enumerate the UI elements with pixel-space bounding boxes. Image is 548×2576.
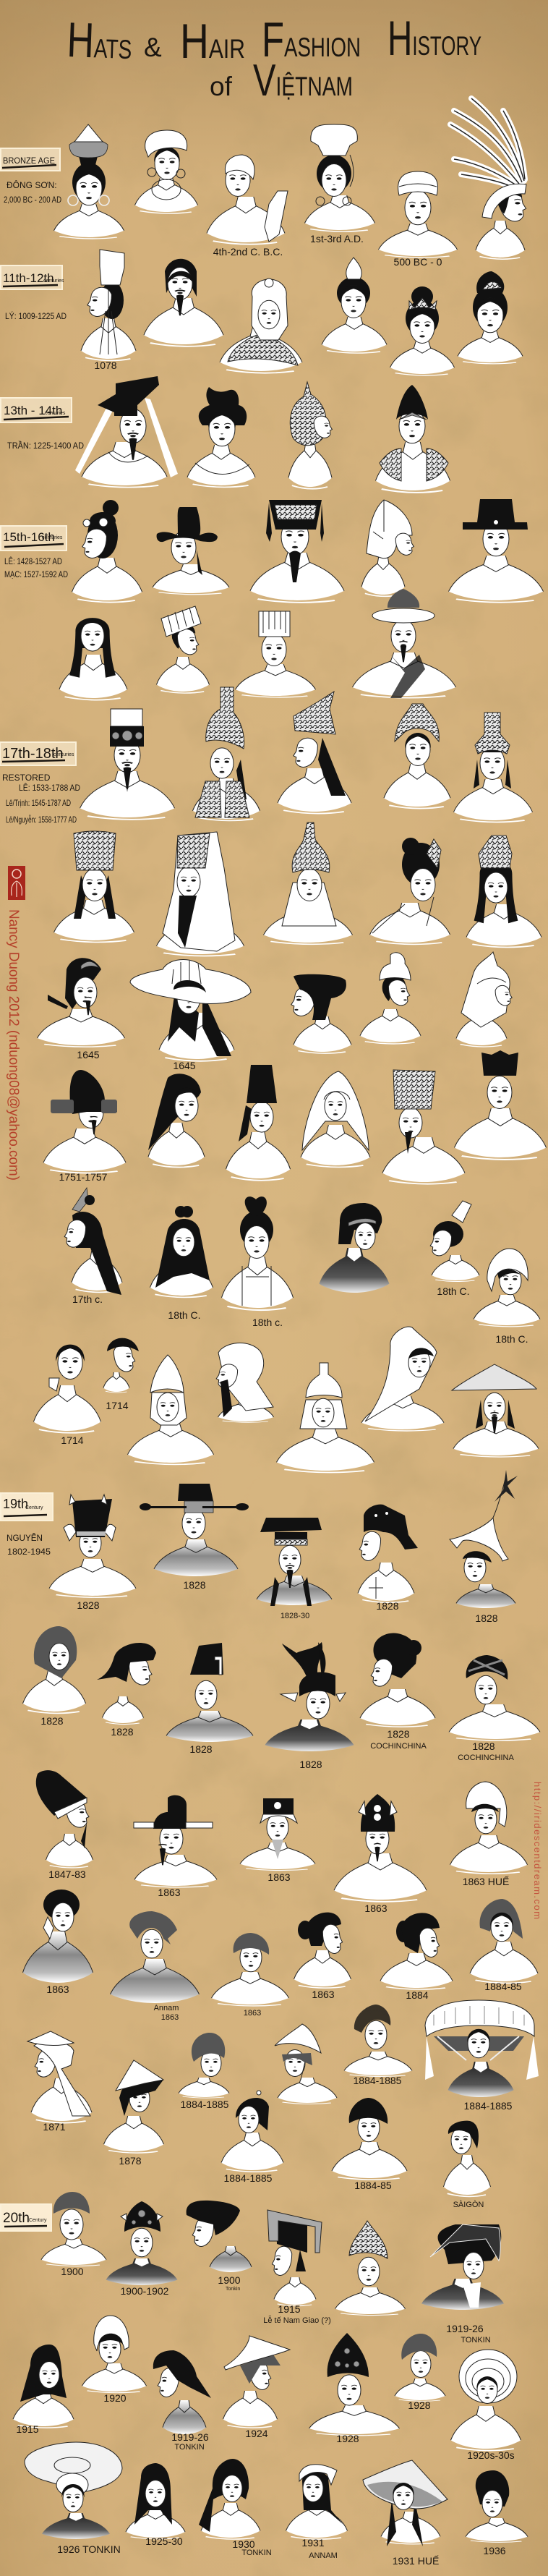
figure: woman with grey hood	[470, 1899, 538, 1983]
caption: 1st-3rd A.D.: 1st-3rd A.D.	[310, 233, 364, 245]
section: 17th-18th centuries	[0, 687, 532, 825]
period label: Bronze Age	[1, 148, 60, 171]
section: 19th century, late row	[221, 2091, 490, 2209]
caption: 17th c.: 17th c.	[72, 1293, 103, 1305]
figure: woman with double-loop hair	[187, 387, 255, 487]
period label: 17th-18th centuries: centuries	[53, 752, 74, 757]
figure: woman with dark collar wrap	[23, 1890, 93, 1983]
period label: 15th-16th centuries: centuries	[42, 535, 63, 540]
caption: 1900-1902: 1900-1902	[121, 2285, 169, 2297]
figure: woman with side bun, Saigon	[444, 2121, 490, 2196]
caption: 1714: 1714	[106, 1400, 129, 1411]
figure: official with black hat and white bars	[134, 1795, 217, 1887]
section: 17th-18th centuries, fourth row	[43, 1050, 547, 1184]
figure: man with dark cap turned backward	[97, 1643, 156, 1725]
figure: woman with double bun and long hair	[150, 1206, 213, 1297]
caption: 1847-83: 1847-83	[48, 1869, 86, 1880]
caption: Saigon: SÀIGÒN	[453, 2200, 484, 2209]
figure: man with large black hair pouf	[291, 974, 351, 1053]
figure: woman with high bun ornament	[458, 271, 523, 364]
caption: 1900 Tonkin	[218, 2274, 241, 2292]
caption: 1900 Tonkin: 1900	[218, 2274, 241, 2286]
caption: 1828: 1828	[40, 1715, 64, 1727]
caption: 1828: 1828	[183, 1579, 206, 1591]
figure: old man with tall white fluted cap	[236, 611, 315, 697]
caption: 1884: 1884	[406, 1989, 429, 2001]
figure: woman with long straight hair	[59, 618, 127, 700]
title	[66, 11, 481, 106]
caption: 1919-26 Tonkin	[446, 2323, 491, 2345]
dynasty dates: Restored Le, Trinh, Nguyen: Lê/Nguyễn: 1558-1777 AD	[6, 814, 77, 825]
caption: 1828: 1828	[475, 1612, 498, 1624]
figure: woman with fan crown	[53, 124, 124, 239]
figure: bearded man with white turban	[216, 1343, 273, 1422]
figure: woman with flame hair ornament	[322, 258, 387, 353]
caption: 1919-26 Tonkin: TONKIN	[461, 2336, 491, 2345]
dynasty dates: Restored Le, Trinh, Nguyen	[2, 773, 80, 825]
title: FASHION	[262, 12, 361, 67]
caption: Annam: ANNAM	[309, 2551, 338, 2560]
figure: man with tall black hat	[226, 1065, 291, 1181]
figure: elderly official with black winged hat	[153, 507, 229, 595]
dynasty dates: Nguyen: 1802-1945	[7, 1547, 51, 1557]
figure: woman with banded cap	[379, 171, 457, 258]
figure: woman with large fringed hat and tassels	[425, 2000, 539, 2097]
figure: woman with white kerchief	[286, 2465, 347, 2539]
caption: 1919-26 Tonkin	[171, 2431, 209, 2452]
caption: 1863: 1863	[267, 1871, 291, 1883]
title: HISTORY	[388, 11, 481, 66]
dynasty dates: Restored Le, Trinh, Nguyen: LÊ: 1533-1788 AD	[19, 782, 80, 793]
section: 19th century, second 1863 row	[23, 1890, 538, 2022]
caption: 1931 Hue: 1931 HUẾ	[393, 2555, 439, 2567]
dynasty dates: Dong Son: 2,000 BC - 200 AD	[4, 195, 61, 205]
period label: 11th-12th centuries: centuries	[43, 279, 64, 284]
period label: 15th-16th centuries: 15th-16th	[3, 530, 55, 544]
figure: woman in profile with small crown	[430, 1201, 479, 1282]
figure: woman with tall black topknot	[376, 385, 450, 493]
figure: woman with dark hair and pendant	[199, 2459, 260, 2539]
figure: warrior with cap	[207, 155, 288, 245]
caption: 1828 Cochinchina: 1828	[387, 1728, 410, 1740]
figure: emperor with filigree crown	[335, 2221, 405, 2316]
section: 20th century, third row	[25, 2442, 528, 2567]
figure: woman with hairpin and necklace	[221, 2091, 283, 2172]
figure: man under black wide hat with scarf	[421, 2224, 504, 2310]
caption: 1828 Cochinchina	[458, 1740, 514, 1762]
period label: 20th century	[1, 2204, 51, 2231]
period label: 20th century: Century	[29, 2218, 47, 2223]
figure: woman with dark updo and veil	[370, 838, 450, 944]
section: Bronze Age	[1, 98, 526, 268]
caption: 1920: 1920	[103, 2392, 127, 2404]
figure: figure with ornate headpiece from behind	[288, 382, 332, 489]
caption: 1930 Tonkin	[232, 2538, 272, 2557]
caption: 500 BC - 0: 500 BC - 0	[394, 256, 442, 268]
dynasty dates: Tran: TRẦN: 1225-1400 AD	[7, 440, 84, 451]
figure: woman with large round white halo turban	[451, 2350, 521, 2451]
figure: man with white fluted hat	[156, 606, 210, 693]
caption: 1884-1885: 1884-1885	[354, 2075, 402, 2086]
figure: woman with tiered crown	[454, 713, 532, 822]
figure: man with white bun cap	[360, 953, 421, 1044]
figure: warrior with domed white helmet	[456, 952, 512, 1047]
figure: woman with white headband	[82, 2316, 146, 2393]
caption: 18th c.: 18th c.	[252, 1317, 283, 1328]
caption: 1925-30: 1925-30	[145, 2535, 183, 2547]
section: 17th-18th centuries, ornate women and officials	[53, 822, 541, 956]
figure: bearded man with wide conical hat	[452, 1364, 539, 1457]
figure: woman with long white veil	[301, 1071, 370, 1167]
dynasty dates: Nguyen	[7, 1532, 51, 1557]
caption: Annam 1863: 1863	[161, 2013, 179, 2022]
caption: 1919-26 Tonkin: 1919-26	[171, 2431, 209, 2443]
section: 11th-12th centuries	[1, 250, 523, 375]
figure: queen with large carved hat	[53, 831, 134, 942]
period label: 13th-14th centuries: centuries	[45, 411, 66, 416]
title: of	[210, 72, 233, 101]
figure: old official with tall black hat	[334, 1794, 427, 1902]
figure: woman with tall double bun	[221, 1196, 294, 1310]
figure: man with dark turban 1900	[41, 2192, 106, 2266]
figure: man with black dotted hood hat	[358, 1505, 418, 1602]
figure: man with feather plume headdress	[450, 98, 526, 259]
figure: woman with tall black turban	[332, 2098, 407, 2180]
caption: 1714: 1714	[61, 1434, 84, 1446]
figure: man with crossed turban	[449, 1655, 540, 1740]
period label: 17th-18th centuries: 17th-18th	[2, 746, 64, 762]
figure: woman with round headdress and necklace	[134, 130, 198, 213]
figure: emperor with black mortarboard crown	[75, 376, 178, 488]
title: HATS	[66, 12, 133, 69]
section: 17th-18th centuries, third row	[38, 952, 512, 1071]
caption: 1828 Cochinchina	[370, 1728, 427, 1751]
figure: woman with short dark hair	[466, 2470, 528, 2542]
title: VIỆTNAM	[253, 56, 353, 106]
caption: 1828-30: 1828-30	[281, 1612, 309, 1620]
figure: woman in profile with long hair and crest	[64, 1188, 122, 1295]
dynasty dates: Restored Le, Trinh, Nguyen: Lê/Trịnh: 1545-1787 AD	[6, 798, 71, 808]
figure: official with rounded black winged hat	[43, 1070, 126, 1173]
dynasty dates: Dong Son	[4, 179, 61, 205]
caption: Annam 1863	[154, 2004, 179, 2022]
caption: 1884-85: 1884-85	[354, 2180, 392, 2191]
caption: 1900 Tonkin: Tonkin	[226, 2287, 240, 2292]
title: HAIR	[180, 14, 245, 69]
caption: 1863: 1863	[244, 2009, 261, 2018]
caption: 1919-26 Tonkin: TONKIN	[174, 2443, 205, 2452]
section: 19th century	[1, 1470, 518, 1624]
figure: man with tall black ornate hat	[267, 2210, 322, 2306]
caption: 1828: 1828	[111, 1726, 134, 1738]
caption: 1884-1885: 1884-1885	[181, 2099, 229, 2110]
figure: man with wrapped scarf and flat hat	[27, 2031, 92, 2123]
seal: artist signature stamp	[8, 866, 25, 900]
period label: Bronze Age: BRONZE AGE	[3, 156, 55, 166]
section: 15th-16th centuries	[1, 499, 544, 603]
dynasty dates: Nguyen: NGUYỄN	[7, 1532, 43, 1543]
figure: bearded man with tall ornate hat	[382, 1070, 465, 1184]
figure: woman with dark scarf turban	[110, 1911, 200, 2003]
figure: noblewoman with swept ornate crown	[278, 692, 351, 814]
caption: 1078: 1078	[94, 360, 117, 371]
figure: emperor with black crown and white ear flaps	[49, 1495, 136, 1597]
figure: emperor with black jewelled crown	[106, 2201, 178, 2285]
dynasty dates: Dong Son: ĐÔNG SƠN:	[7, 179, 57, 190]
caption: 1645: 1645	[77, 1049, 100, 1060]
caption: Le te Nam Giao: Lễ tế Nam Giao (?)	[263, 2316, 331, 2325]
figure: official with long-winged hat	[140, 1484, 249, 1576]
figure: woman with high crown and long hair	[466, 836, 541, 947]
section: 19th century, second row	[23, 1626, 540, 1770]
section: 20th century, second row	[13, 2316, 521, 2461]
caption: 1884-85: 1884-85	[484, 1981, 522, 1992]
caption: 1828: 1828	[189, 1743, 213, 1755]
dynasty dates: Le and Mac: MẠC: 1527-1592 AD	[4, 569, 68, 579]
figure: woman with huge disk hat	[25, 2442, 122, 2539]
caption: 1915: 1915	[16, 2423, 39, 2435]
section: early 18th century, 1714 row	[33, 1327, 539, 1473]
section: 19th century, 1871 to 1885 row	[27, 2000, 539, 2167]
period label: 19th century	[1, 1493, 53, 1521]
caption: 1928: 1928	[336, 2433, 359, 2444]
figure: woman with long flowing hair	[148, 1074, 205, 1168]
caption: 1930 Tonkin: 1930	[232, 2538, 255, 2550]
figure: woman with low hair bun	[380, 1913, 453, 1989]
caption: 1924: 1924	[245, 2428, 268, 2439]
figure: woman with headscarf tie	[33, 1345, 101, 1433]
figure: man with hair tied back	[294, 1913, 351, 1988]
figure: woman with dark bun	[360, 1633, 435, 1727]
figure: old woman with dark turban	[211, 1933, 289, 2006]
caption: 1919-26 Tonkin: 1919-26	[446, 2323, 484, 2334]
figure: woman with dark hood	[13, 2345, 74, 2428]
figure: man with black turban, profile	[187, 2201, 252, 2272]
figure: man with grey turban	[179, 2033, 229, 2098]
period label: 11th-12th centuries	[1, 265, 64, 289]
caption: 18th C.: 18th C.	[495, 1333, 528, 1345]
figure: woman with white flat turban	[474, 1249, 540, 1327]
figure: man with tall white cone hat	[127, 1355, 214, 1464]
figure: old man with dark hair and robe	[320, 1203, 389, 1293]
figure: woman with dark turban	[23, 1626, 85, 1713]
figure: queen with towering ornate crown	[192, 687, 260, 820]
caption: 1863: 1863	[46, 1984, 69, 1995]
period label: 13th-14th centuries: 13th - 14th	[4, 404, 62, 417]
caption: 1828: 1828	[299, 1759, 322, 1770]
caption: 1900: 1900	[61, 2266, 84, 2277]
dynasty dates: Restored Le, Trinh, Nguyen: RESTORED	[2, 773, 51, 783]
period label: 13th-14th centuries	[1, 398, 72, 422]
figure: man with black brimmed hat	[448, 499, 544, 603]
section: 15th-16th centuries, second row	[59, 589, 455, 700]
figure: child with cropped hair	[103, 1338, 139, 1393]
figure: king with black ornate hat	[80, 709, 175, 820]
figure: man with white conical hat and feather	[450, 1470, 518, 1608]
figure: man with grey turban 1928	[395, 2334, 445, 2401]
period label: 11th-12th centuries: 11th-12th	[3, 271, 54, 285]
caption: 1751-1757: 1751-1757	[59, 1171, 108, 1183]
caption: 1863 Hue: 1863 HUẾ	[463, 1876, 509, 1887]
section: 19th century, 1863 row	[36, 1770, 528, 1914]
figure: man with conical hat over turban	[104, 2060, 163, 2153]
caption: 1884-1885: 1884-1885	[224, 2172, 273, 2184]
caption: 18th C.: 18th C.	[168, 1309, 201, 1321]
figure: man with tall ornate white crown	[276, 1363, 374, 1473]
caption: 1828 Cochinchina: COCHINCHINA	[370, 1742, 427, 1751]
figure: man with black notched hat	[454, 1050, 547, 1160]
figure: old man with black and white patterned hat	[240, 1798, 315, 1871]
figure: old woman with white head wrap	[450, 1782, 528, 1874]
caption: Annam 1863: Annam	[154, 2004, 179, 2012]
figure: woman with ornate crown and white veil	[263, 822, 353, 944]
figure: man with white conical hat and chin strap	[275, 2024, 337, 2104]
caption: 4th-2nd C. B.C.: 4th-2nd C. B.C.	[213, 246, 283, 258]
artist credit: Nancy Duong 2012 (nduong08@yahoo.com)	[6, 909, 21, 1181]
period label: 17th-18th centuries	[0, 742, 76, 765]
dynasty dates: Le and Mac	[4, 556, 68, 579]
caption: 1828 Cochinchina: 1828	[472, 1740, 495, 1752]
figure: emperor with towering jewelled crown	[309, 2333, 399, 2436]
dynasty dates: Le and Mac: LÊ: 1428-1527 AD	[4, 556, 62, 566]
caption: 1828: 1828	[376, 1600, 399, 1612]
caption: 1863: 1863	[312, 1989, 335, 2000]
figure: man with conical white hat and dark hair	[223, 2336, 290, 2428]
figure: bearded man with white veil hat	[156, 832, 244, 956]
figure: woman with jewelled tiara	[390, 286, 454, 375]
figure: woman with dark head wrap	[344, 2005, 412, 2076]
figure: woman with headband and long hair	[126, 2463, 185, 2539]
caption: 1878: 1878	[119, 2155, 142, 2167]
caption: 1931: 1931	[301, 2537, 325, 2549]
figure: woman with white head wrap	[361, 1327, 444, 1431]
section: 17th-18th centuries, fifth row	[64, 1188, 540, 1345]
figure: man with tall dark hat and grey robe	[166, 1643, 253, 1742]
caption: 18th C.: 18th C.	[437, 1285, 470, 1297]
period label: 15th-16th centuries	[1, 526, 67, 551]
website URL: http://iridescentdream.com	[532, 1782, 543, 1919]
caption: 1926 Tonkin: 1926 TONKIN	[57, 2543, 121, 2555]
figure: woman with bun and flowers	[72, 500, 142, 603]
caption: 1915: 1915	[278, 2303, 301, 2315]
caption: 1928: 1928	[408, 2399, 431, 2411]
figure: man in white hooded hat, profile	[361, 500, 414, 596]
dynasty dates: Ly: LÝ: 1009-1225 AD	[5, 310, 67, 321]
figure: man with tall curled dark hat	[36, 1770, 93, 1868]
figure: bearded man with black hair	[144, 259, 223, 347]
figure: man with balding head and topknot	[38, 958, 124, 1047]
caption: 1863: 1863	[364, 1903, 388, 1914]
caption: 1936: 1936	[483, 2545, 506, 2556]
figure: woman with non la conical hat	[363, 2460, 448, 2546]
figure: official with flat board hat	[257, 1518, 332, 1606]
figure: man in profile with tall white hat	[81, 250, 136, 360]
caption: 1828 Cochinchina: COCHINCHINA	[458, 1754, 514, 1762]
caption: 1863: 1863	[158, 1887, 181, 1898]
figure: woman with tall white headdress	[305, 124, 374, 231]
figure: woman with filigree crown	[384, 704, 450, 809]
period label: 20th century: 20th	[3, 2211, 30, 2226]
title: &	[144, 33, 162, 62]
figure: figure in ornate helmet and robe	[220, 279, 302, 373]
period label: 19th century: 19th	[3, 1497, 28, 1511]
section: 20th century	[1, 2192, 504, 2345]
figure: man with dark brimmed conical hat and dark collar	[353, 589, 455, 698]
caption: 1930 Tonkin: TONKIN	[241, 2549, 272, 2557]
section: 13th-14th centuries	[1, 376, 450, 493]
caption: 1920s-30s: 1920s-30s	[467, 2449, 515, 2461]
figure: woman with wide bamboo hat	[130, 959, 251, 1061]
figure: warrior with black plumed hat	[265, 1642, 354, 1751]
period label: 19th century: Century	[25, 1505, 43, 1510]
figure: emperor with dark ornate crown and long beard	[250, 500, 344, 603]
figure: woman with dark bandana, profile	[153, 2350, 211, 2434]
caption: 1871: 1871	[43, 2121, 66, 2133]
caption: 1645: 1645	[173, 1060, 196, 1071]
caption: 1828: 1828	[77, 1599, 100, 1611]
caption: 1884-1885: 1884-1885	[464, 2100, 513, 2112]
